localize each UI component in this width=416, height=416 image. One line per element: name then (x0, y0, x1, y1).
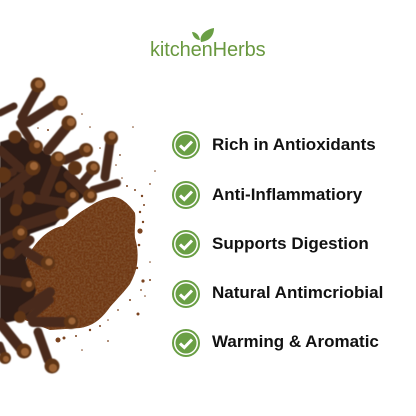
logo wordmark: kitchenHerbs (150, 39, 266, 61)
powder specks (37, 113, 156, 351)
clove heads (0, 78, 118, 374)
benefit 2: Anti-Inflammatiory (212, 185, 362, 204)
benefit 5: Warming & Aromatic (212, 332, 379, 351)
icon: check 4 (172, 280, 200, 308)
clove stems (0, 90, 117, 360)
benefit 1: Rich in Antioxidants (212, 135, 376, 154)
cloves (0, 78, 118, 374)
logo: kitchenHerbs (150, 28, 266, 61)
icon: check 5 (172, 329, 200, 357)
benefit 4: Natural Antimcriobial (212, 283, 383, 302)
benefit 3: Supports Digestion (212, 234, 369, 253)
dark clove mass (0, 136, 90, 324)
powder pile (25, 197, 138, 330)
icon: two green leaves (192, 28, 214, 42)
icon: check 3 (172, 230, 200, 258)
icon: check 2 (172, 181, 200, 209)
icon: check 1 (172, 131, 200, 159)
